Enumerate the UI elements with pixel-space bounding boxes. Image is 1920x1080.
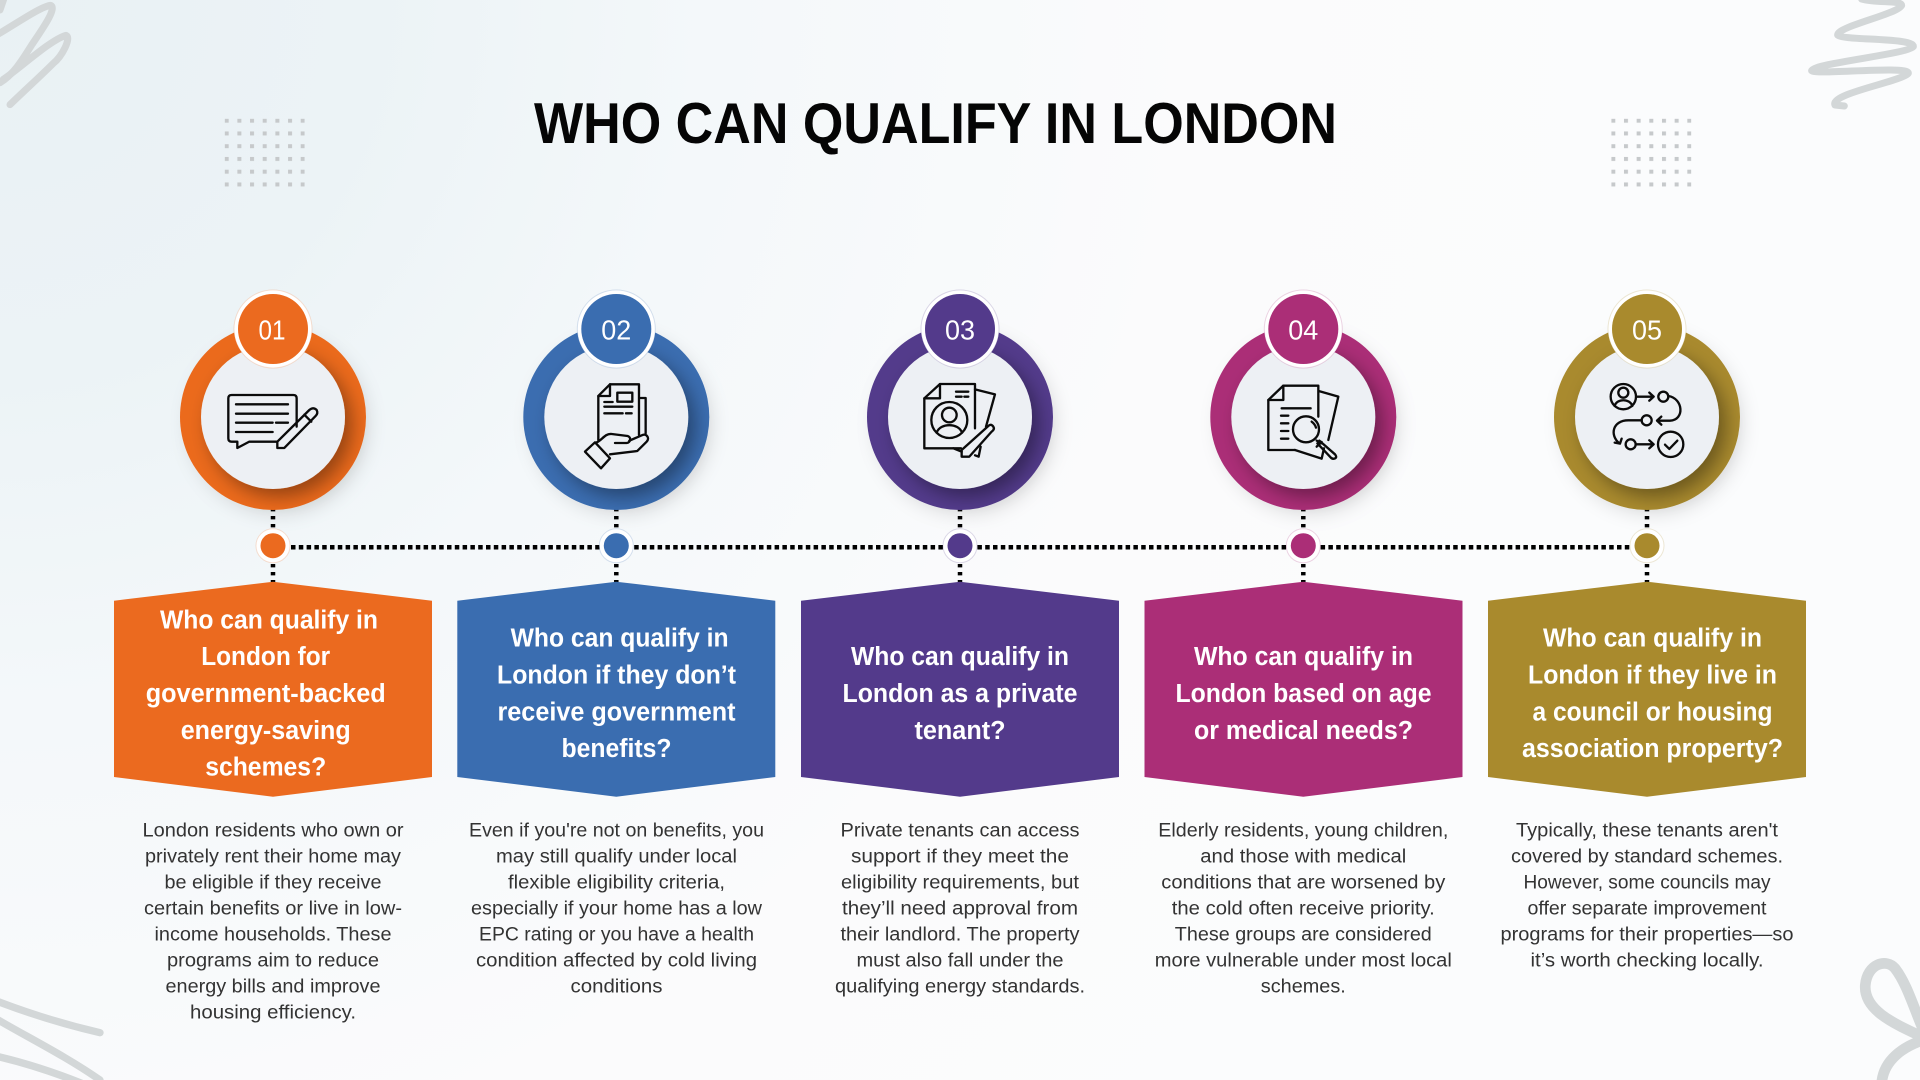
body text: eligibility requirements, but	[841, 872, 1080, 894]
number badge	[234, 290, 312, 368]
heading banner: London if they live in	[1528, 662, 1777, 690]
number badge: 03	[945, 314, 975, 346]
body text: certain benefits or live in low-	[144, 898, 402, 920]
body text: These groups are considered	[1175, 924, 1432, 946]
body text: especially if your home has a low	[471, 898, 763, 920]
timeline dotted line	[291, 545, 1630, 550]
heading banner: a council or housing	[1532, 698, 1772, 726]
body text: privately rent their home may	[145, 846, 401, 868]
number badge: 02	[601, 314, 631, 346]
timeline node	[256, 529, 290, 563]
number badge: 01	[258, 314, 286, 346]
heading banner	[114, 582, 432, 797]
body text: qualifying energy standards.	[835, 976, 1085, 998]
heading banner: Who can qualify in	[160, 606, 378, 634]
ring	[1210, 324, 1396, 510]
heading banner: association property?	[1522, 735, 1783, 763]
panel: step 02	[457, 290, 775, 998]
body text: it’s worth checking locally.	[1530, 950, 1764, 972]
inner circle	[1231, 345, 1375, 489]
connector	[271, 508, 275, 582]
body text	[1500, 820, 1794, 972]
body text: Elderly residents, young children,	[1158, 820, 1448, 842]
body text: condition affected by cold living	[476, 950, 757, 972]
heading banner: London based on age	[1176, 680, 1432, 708]
body text	[142, 820, 404, 1024]
body text: must also fall under the	[856, 950, 1064, 972]
icon: note and pen	[228, 395, 317, 448]
number badge: 04	[1288, 314, 1318, 346]
body text: income households. These	[154, 924, 392, 946]
body text: energy bills and improve	[166, 976, 381, 998]
dot grid: right	[1611, 119, 1691, 193]
body text: their landlord. The property	[840, 924, 1080, 946]
scribble: top left	[0, 0, 68, 105]
heading banner: London as a private	[842, 680, 1078, 708]
heading banner: tenant?	[914, 717, 1006, 745]
heading banner	[457, 582, 775, 797]
body text: conditions	[570, 976, 663, 998]
heading banner: receive government	[498, 698, 736, 726]
icon: profile documents and pen	[924, 384, 995, 457]
heading banner	[1488, 582, 1806, 797]
panel: step 03	[801, 290, 1119, 998]
body text	[835, 820, 1085, 998]
heading banner: government-backed	[146, 680, 386, 708]
body text: more vulnerable under most local	[1155, 950, 1452, 972]
icon: process flow	[1611, 384, 1683, 457]
body text: be eligible if they receive	[164, 872, 382, 894]
panel: step 05	[1488, 290, 1806, 972]
heading banner: schemes?	[205, 754, 326, 782]
number badge	[577, 290, 655, 368]
panel: step 01	[114, 290, 432, 1024]
body text: Even if you're not on benefits, you	[469, 820, 764, 842]
inner circle	[1575, 345, 1719, 489]
body text: and those with medical	[1200, 846, 1406, 868]
heading banner: Who can qualify in	[1194, 643, 1413, 671]
body text: However, some councils may	[1524, 872, 1771, 894]
panel: step 04	[1144, 290, 1462, 998]
heading banner: London for	[201, 643, 330, 671]
body text: offer separate improvement	[1528, 898, 1767, 920]
body text: the cold often receive priority.	[1172, 898, 1435, 920]
number badge	[1264, 290, 1342, 368]
number badge	[921, 290, 999, 368]
connector	[614, 508, 619, 582]
body text: Private tenants can access	[840, 820, 1080, 842]
scribble: top right	[1812, 0, 1913, 106]
body text: EPC rating or you have a health	[479, 924, 754, 946]
title: WHO CAN QUALIFY IN LONDON	[534, 92, 1337, 156]
connector	[1645, 508, 1649, 582]
heading banner	[1144, 582, 1462, 797]
ring	[523, 324, 709, 510]
body text: London residents who own or	[142, 820, 404, 842]
body text: housing efficiency.	[190, 1002, 356, 1024]
heading banner: benefits?	[562, 735, 672, 763]
timeline node	[599, 529, 633, 563]
body text: may still qualify under local	[496, 846, 737, 868]
timeline node	[1286, 529, 1320, 563]
inner circle	[544, 345, 688, 489]
body text: support if they meet the	[851, 846, 1069, 868]
body text	[469, 820, 764, 998]
number badge	[1608, 290, 1686, 368]
connector	[958, 508, 962, 582]
heading banner: or medical needs?	[1194, 717, 1413, 745]
icon: hand holding document	[585, 384, 648, 468]
timeline node	[943, 529, 977, 563]
scribble: bottom right	[1865, 963, 1920, 1080]
dot grid: left	[225, 119, 305, 193]
body text: covered by standard schemes.	[1511, 846, 1783, 868]
timeline node	[1630, 529, 1664, 563]
heading banner: Who can qualify in	[1543, 625, 1762, 653]
ring	[1554, 324, 1740, 510]
inner circle	[201, 345, 345, 489]
heading banner: Who can qualify in	[511, 625, 729, 653]
heading banner	[801, 582, 1119, 797]
body text: Typically, these tenants aren't	[1516, 820, 1779, 842]
body text: programs aim to reduce	[167, 950, 379, 972]
icon: documents and magnifier	[1268, 386, 1338, 459]
inner circle	[888, 345, 1032, 489]
ring	[180, 324, 366, 510]
body text: flexible eligibility criteria,	[508, 872, 725, 894]
connector	[1301, 508, 1306, 582]
body text	[1155, 820, 1452, 998]
number badge: 05	[1632, 314, 1662, 346]
ring	[867, 324, 1053, 510]
body text: conditions that are worsened by	[1161, 872, 1445, 894]
body text: they’ll need approval from	[842, 898, 1078, 920]
body text: programs for their properties—so	[1500, 924, 1794, 946]
heading banner: London if they don’t	[497, 662, 736, 690]
scribble: bottom left	[0, 1002, 100, 1080]
heading banner: energy-saving	[181, 717, 351, 745]
body text: schemes.	[1261, 976, 1346, 998]
heading banner: Who can qualify in	[851, 643, 1069, 671]
